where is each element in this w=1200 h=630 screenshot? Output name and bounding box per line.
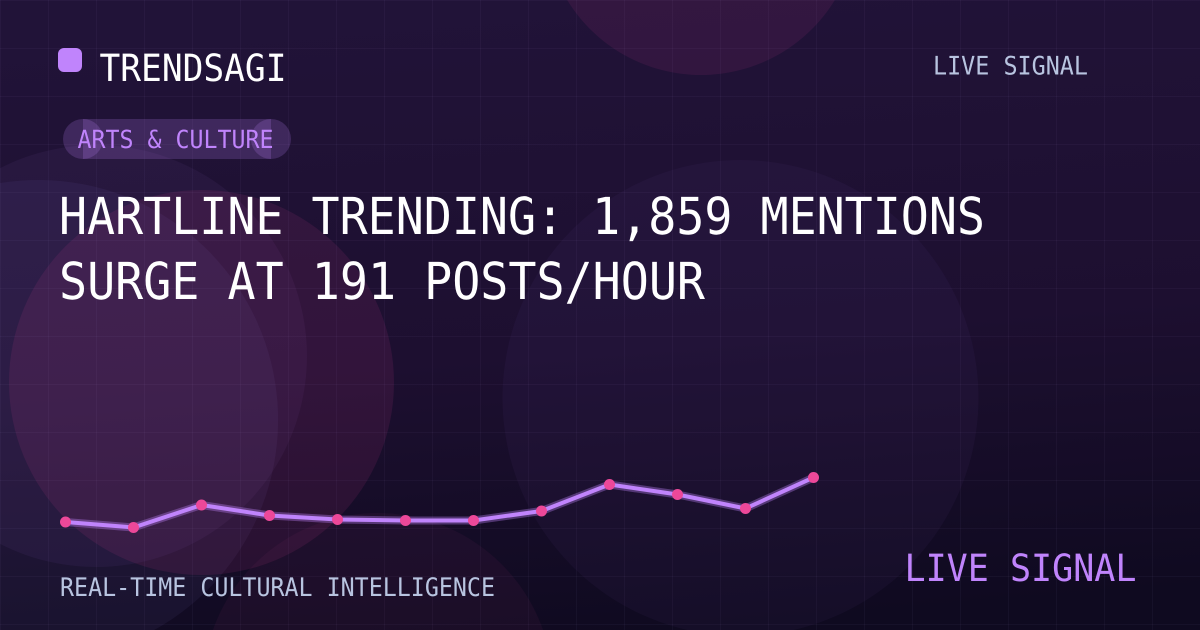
headline: SURGE AT 191 POSTS/HOUR: [59, 253, 705, 312]
footer tagline: REAL-TIME CULTURAL INTELLIGENCE: [60, 573, 495, 603]
header live signal label: LIVE SIGNAL: [933, 52, 1088, 82]
brand name: TRENDSAGI: [100, 46, 286, 90]
line chart: mentions trend: [60, 472, 819, 533]
headline: [59, 188, 985, 312]
category pill: ARTS & CULTURE: [78, 125, 274, 154]
footer live signal label: LIVE SIGNAL: [904, 546, 1136, 590]
headline: HARTLINE TRENDING: 1,859 MENTIONS: [59, 188, 985, 247]
brand logo mark: [58, 48, 82, 72]
category pill: [63, 119, 291, 159]
